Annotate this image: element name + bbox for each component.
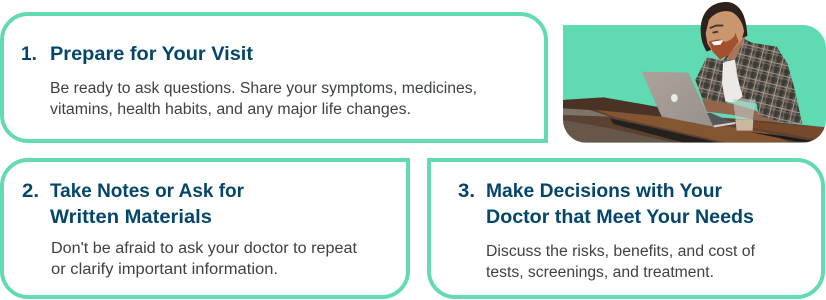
step 2 body text: or clarify important information. (51, 261, 278, 278)
laptop (642, 72, 735, 127)
step 3 heading: Doctor that Meet Your Needs (486, 207, 754, 228)
step 2 heading (50, 181, 245, 228)
apple logo (671, 94, 678, 102)
panel: step 3 make decisions (429, 160, 823, 297)
step 3 body text: Discuss the risks, benefits, and cost of (486, 243, 756, 260)
step 1 body text: vitamins, health habits, and any major life changes. (50, 101, 411, 118)
wooden table (563, 97, 826, 143)
step 2 number: 2. (22, 181, 39, 202)
hair (701, 2, 747, 52)
step 3 body text: tests, screenings, and treatment. (486, 264, 714, 281)
step 1 body text: Be ready to ask questions. Share your symptoms, medicines, (50, 80, 477, 97)
step 1 body text (50, 80, 477, 118)
panel: step 1 prepare for your visit (2, 14, 546, 141)
step 1 heading: Prepare for Your Visit (50, 44, 254, 65)
white t-shirt (722, 59, 743, 102)
step 2 body text: Don't be afraid to ask your doctor to repeat (51, 240, 358, 257)
step 2 body text (51, 240, 358, 278)
face (706, 11, 744, 57)
step 3 body text (486, 243, 756, 281)
man (695, 2, 802, 124)
step 3 number: 3. (458, 181, 475, 202)
green photo background (563, 25, 826, 143)
step 3 heading (486, 181, 754, 228)
panel: step 2 take notes (2, 160, 408, 297)
eyes and brows (709, 25, 723, 34)
step 3 heading: Make Decisions with Your (486, 181, 723, 202)
step 2 heading: Take Notes or Ask for (50, 181, 245, 202)
forearm (702, 98, 780, 122)
neck (726, 36, 745, 60)
glass cup (733, 99, 756, 131)
smile (711, 40, 723, 45)
step 2 heading: Written Materials (50, 207, 212, 228)
photo: man at laptop on green panel (563, 2, 826, 143)
beard (709, 33, 739, 59)
step 1 number: 1. (21, 44, 37, 65)
plaid shirt (695, 37, 802, 124)
